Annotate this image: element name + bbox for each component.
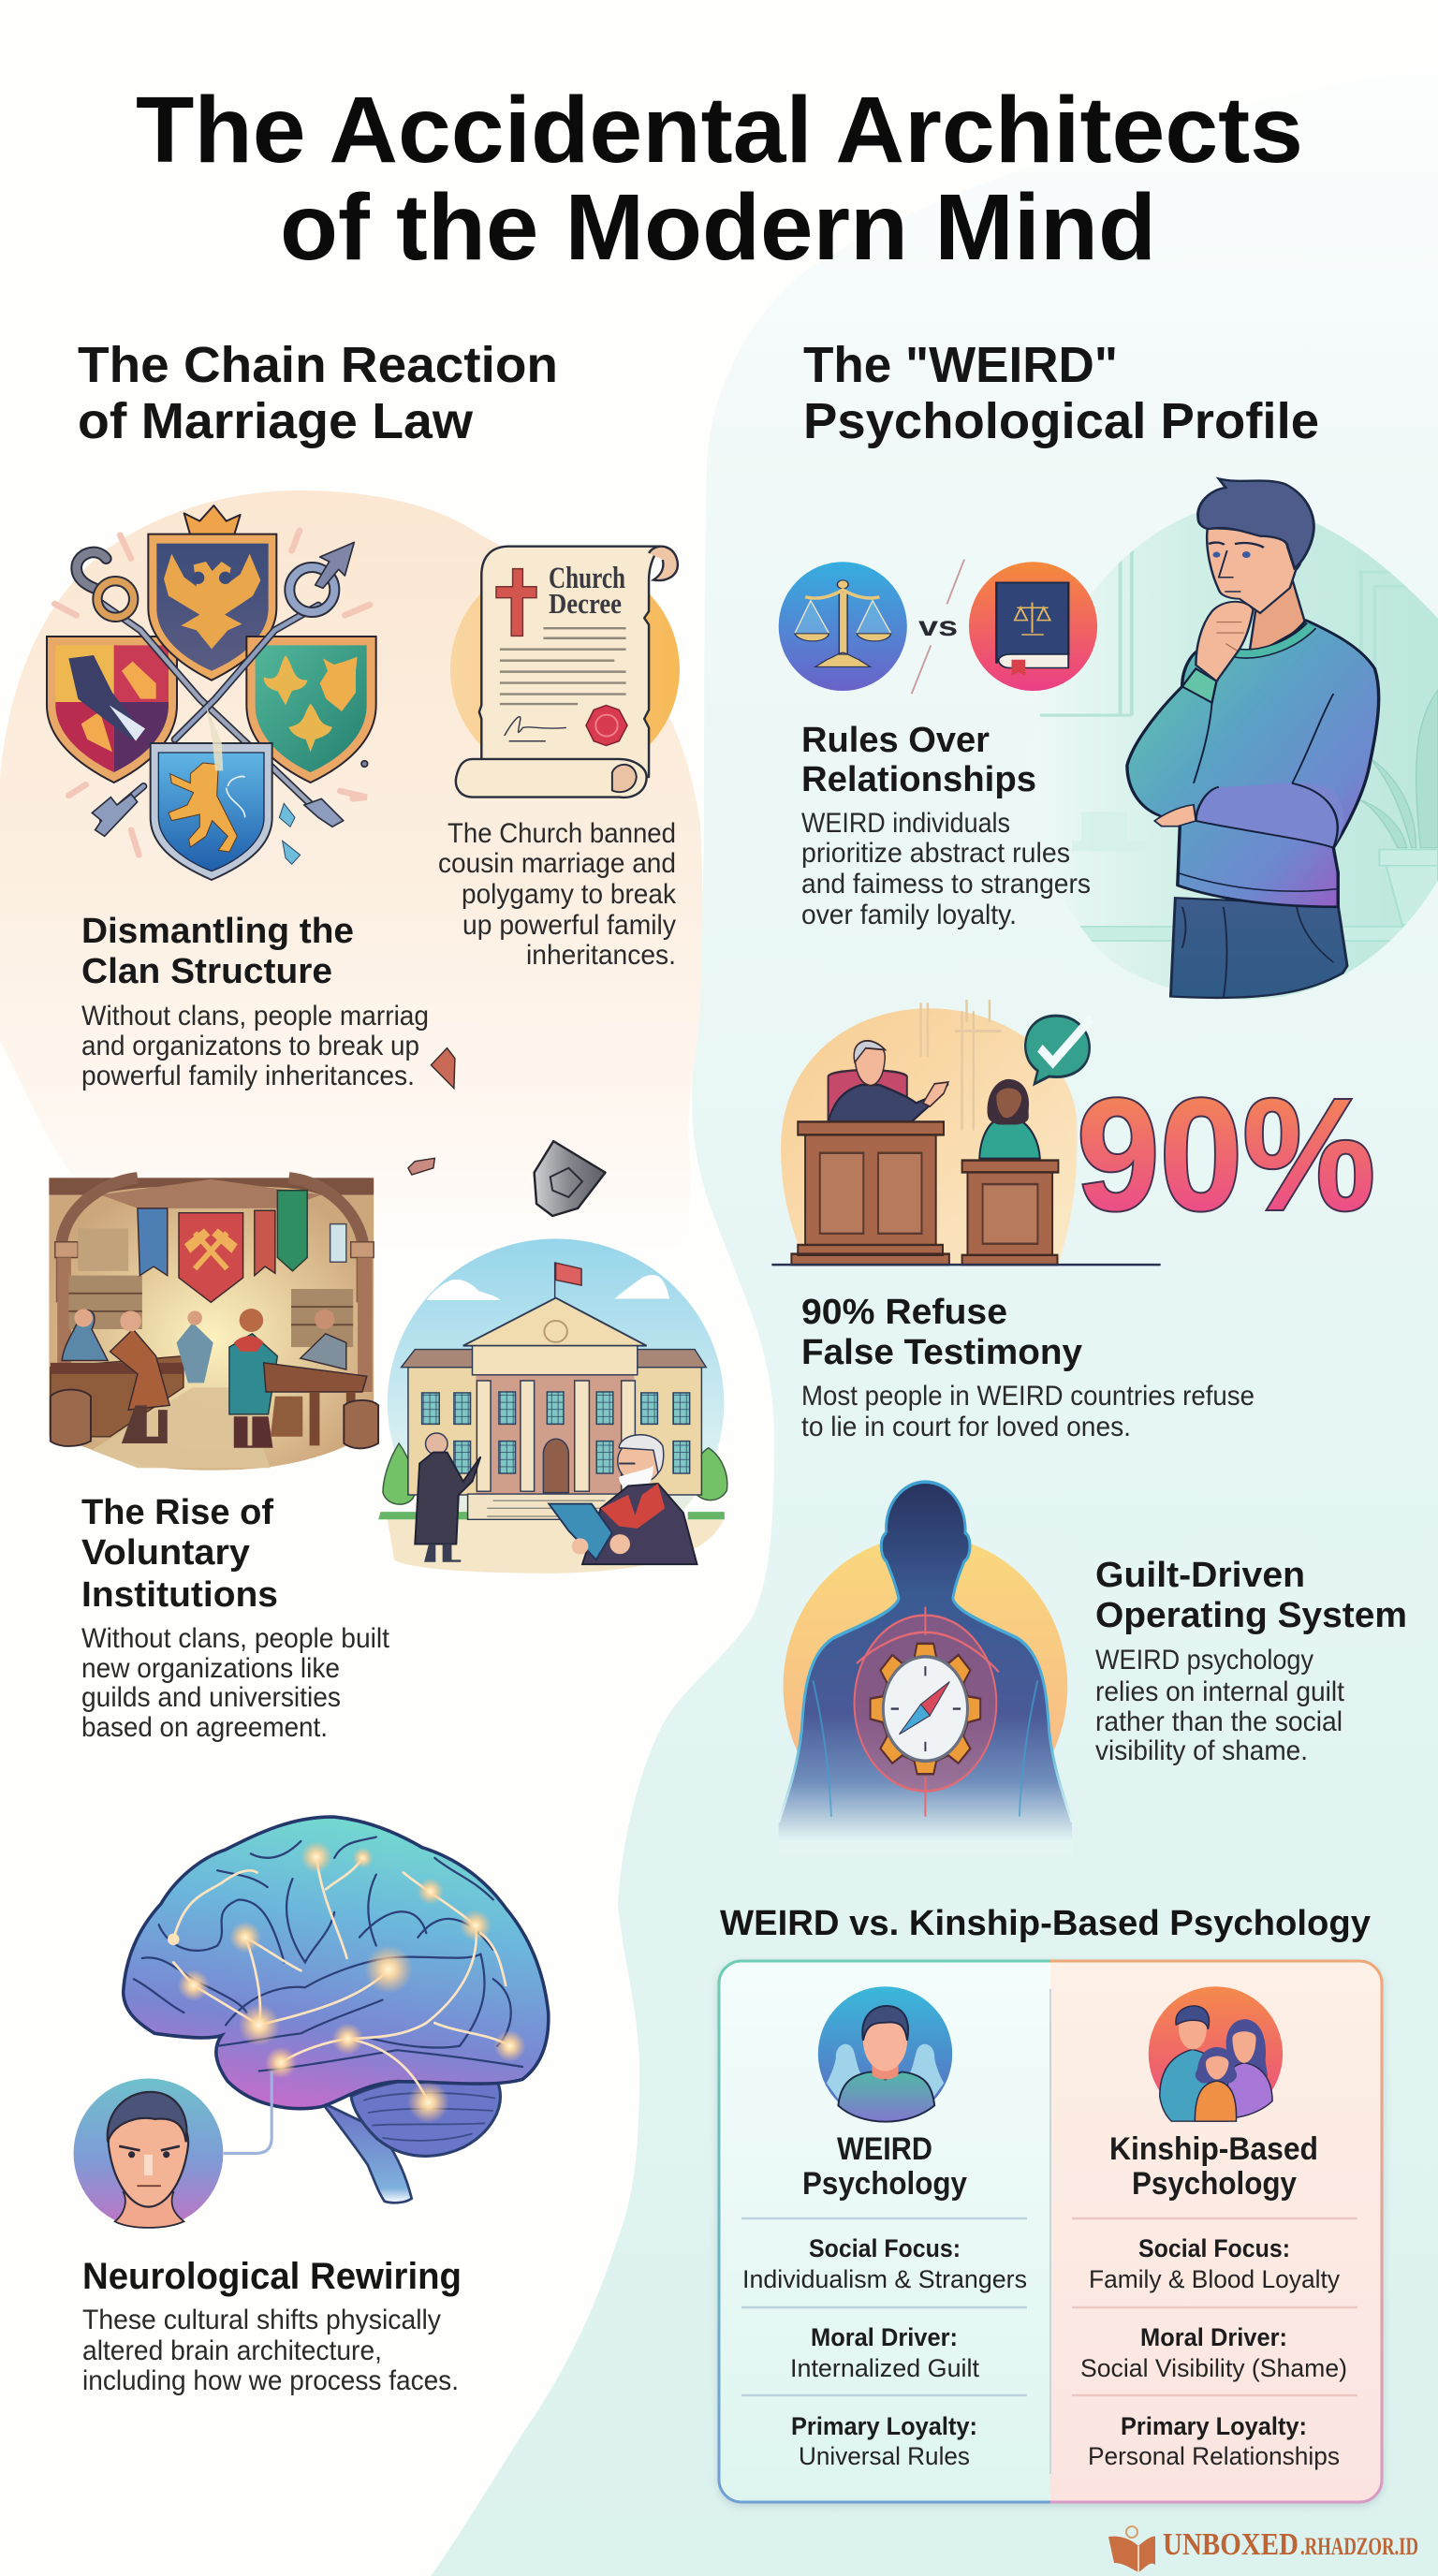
- text: Neurological Rewiring: including how we process faces.: [82, 2365, 459, 2396]
- comparison card: [719, 1961, 1382, 2502]
- text: Rules Over Relationships: Relationships: [801, 760, 1036, 799]
- text: Rules Over Relationships: prioritize abstract rules: [801, 838, 1070, 869]
- heading: The Chain Reaction of Marriage Law: of Marriage Law: [78, 393, 474, 449]
- text: Neurological Rewiring: These cultural shifts physically: [82, 2305, 441, 2335]
- logo: Unboxed watermark: [1108, 2526, 1418, 2572]
- column: WEIRD psychology: Psychology: [802, 2166, 967, 2202]
- bottom heraldic shield with lion: [151, 705, 272, 880]
- logo: Unboxed watermark: UNBOXED: [1163, 2527, 1299, 2562]
- icon: family: [1149, 1986, 1283, 2121]
- text: Dismantling the Clan Structure: Dismantling the: [81, 912, 354, 951]
- text: Guilt-Driven Operating System: [1095, 1556, 1407, 1766]
- text: church banned cousin marriage: The Church banned: [448, 818, 676, 849]
- column: Kinship-Based psychology: Personal Relationships: [1088, 2442, 1340, 2470]
- text: Guilt-Driven Operating System: Operating System: [1095, 1596, 1407, 1635]
- icon: church decree scroll: Church: [549, 562, 625, 595]
- broken chains: [77, 552, 334, 821]
- text: Neurological Rewiring: [82, 2256, 462, 2396]
- heading: The Chain Reaction of Marriage Law: [78, 337, 558, 449]
- column: WEIRD psychology: Internalized Guilt: [790, 2354, 979, 2382]
- text: Dismantling the Clan Structure: Without clans, people marriag: [81, 1001, 429, 1032]
- heading: comparison table: WEIRD vs. Kinship-Based Psychology: [720, 1904, 1371, 1943]
- text: Rules Over Relationships: over family loyalty.: [801, 900, 1017, 930]
- heading: The WEIRD Psychological Profile: The "WEIRD": [803, 337, 1118, 393]
- text: The Rise of Voluntary Institutions: based on agreement.: [81, 1712, 328, 1743]
- illustration: brain with glowing pathways: [124, 1817, 549, 2203]
- column: Kinship-Based psychology: Primary Loyalty:: [1121, 2412, 1307, 2440]
- top heraldic shield with eagle: [148, 505, 276, 681]
- column: Kinship-Based psychology: [1080, 2131, 1347, 2470]
- heading: The WEIRD Psychological Profile: Psychological Profile: [803, 393, 1319, 449]
- text: The Rise of Voluntary Institutions: [81, 1493, 390, 1743]
- title: of the Modern Mind: [280, 175, 1156, 280]
- icon: face portrait linked to brain: [74, 2071, 271, 2228]
- heading: The WEIRD Psychological Profile: [803, 337, 1319, 449]
- column: Kinship-Based psychology: Moral Driver:: [1140, 2323, 1287, 2351]
- background wave: mint right column: [431, 66, 1438, 2576]
- column: WEIRD psychology: Social Focus:: [809, 2234, 961, 2262]
- text: 90% Refuse False Testimony: to lie in court for loved ones.: [801, 1412, 1131, 1442]
- column: WEIRD psychology: WEIRD: [837, 2131, 932, 2167]
- text: The Rise of Voluntary Institutions: The Rise of: [81, 1493, 273, 1532]
- text: Dismantling the Clan Structure: Clan Structure: [81, 952, 332, 991]
- title: The Accidental Architects: [136, 78, 1303, 183]
- icon: broken clan shields: [47, 505, 376, 880]
- column: Kinship-Based psychology: Family & Blood Loyalty: [1089, 2265, 1340, 2293]
- big number: 90%: 90%: [1077, 1066, 1375, 1244]
- text: Guilt-Driven Operating System: relies on internal guilt: [1095, 1676, 1345, 1707]
- illustration: medieval guild hall: [49, 1178, 378, 1471]
- text: church banned cousin marriage: cousin marriage and: [438, 848, 676, 879]
- text: church banned cousin marriage: up powerful family: [462, 910, 676, 941]
- text: Guilt-Driven Operating System: WEIRD psychology: [1095, 1645, 1313, 1676]
- column: Kinship-Based psychology: Social Visibility (Shame): [1080, 2354, 1347, 2382]
- text: church banned cousin marriage: polygamy to break: [462, 879, 677, 910]
- right heraldic shield with lilies: [246, 637, 376, 783]
- background blob: peach left column: [0, 490, 702, 1259]
- text: Rules Over Relationships: and faimess to strangers: [801, 869, 1091, 900]
- right professor with book: [549, 1435, 697, 1564]
- left heraldic shield: [47, 637, 177, 783]
- icon: church decree scroll: [450, 547, 680, 798]
- text: Rules Over Relationships: Rules Over: [801, 721, 990, 760]
- icon: individual: [818, 1986, 952, 2122]
- icon: scales versus law book: vs: [918, 611, 958, 642]
- text: The Rise of Voluntary Institutions: Institutions: [81, 1575, 278, 1615]
- text: church banned cousin marriage: [438, 818, 677, 971]
- column: WEIRD psychology: Moral Driver:: [811, 2323, 958, 2351]
- text: Guilt-Driven Operating System: Guilt-Driven: [1095, 1556, 1305, 1595]
- icon: falling shield fragments: [408, 1048, 606, 1216]
- text: 90% Refuse False Testimony: [801, 1293, 1255, 1442]
- text: 90% Refuse False Testimony: Most people in WEIRD countries refuse: [801, 1381, 1255, 1412]
- column: Kinship-Based psychology: Kinship-Based: [1109, 2131, 1318, 2167]
- text: Dismantling the Clan Structure: powerful family inheritances.: [81, 1061, 415, 1091]
- text: 90% Refuse False Testimony: False Testimony: [801, 1333, 1082, 1372]
- text: Neurological Rewiring: altered brain architecture,: [82, 2335, 382, 2366]
- column: WEIRD psychology: Individualism & Strangers: [742, 2265, 1027, 2293]
- text: Rules Over Relationships: [801, 721, 1091, 930]
- text: The Rise of Voluntary Institutions: Without clans, people built: [81, 1623, 390, 1654]
- illustration: university with professors: [378, 1238, 727, 1573]
- illustration: thinking man: [1031, 478, 1438, 1000]
- column: WEIRD psychology: [742, 2131, 1027, 2470]
- text: Guilt-Driven Operating System: rather than the social: [1095, 1706, 1343, 1737]
- illustration: courtroom with witness: [771, 1000, 1161, 1265]
- text: Neurological Rewiring: Neurological Rewiring: [82, 2256, 462, 2297]
- text: The Rise of Voluntary Institutions: Voluntary: [81, 1533, 250, 1573]
- text: Dismantling the Clan Structure: [81, 912, 429, 1091]
- column: Kinship-Based psychology: Psychology: [1132, 2166, 1297, 2202]
- text: church banned cousin marriage: inheritances.: [526, 940, 676, 971]
- icon: scales versus law book: [779, 560, 1097, 694]
- text: Dismantling the Clan Structure: and organizatons to break up: [81, 1031, 419, 1061]
- text: The Rise of Voluntary Institutions: guilds and universities: [81, 1682, 341, 1713]
- column: Kinship-Based psychology: Social Focus:: [1138, 2234, 1290, 2262]
- column: WEIRD psychology: Universal Rules: [799, 2442, 970, 2470]
- text: Rules Over Relationships: WEIRD individuals: [801, 808, 1010, 839]
- icon: church decree scroll: Decree: [549, 587, 622, 620]
- title: [136, 78, 1303, 280]
- illustration: guilt compass in body: [779, 1482, 1072, 1856]
- text: The Rise of Voluntary Institutions: new organizations like: [81, 1653, 340, 1684]
- text: Guilt-Driven Operating System: visibility of shame.: [1095, 1735, 1308, 1766]
- text: 90% Refuse False Testimony: 90% Refuse: [801, 1293, 1007, 1332]
- column: WEIRD psychology: Primary Loyalty:: [791, 2412, 977, 2440]
- heading: The Chain Reaction of Marriage Law: The Chain Reaction: [78, 337, 558, 393]
- left professor: [415, 1433, 480, 1562]
